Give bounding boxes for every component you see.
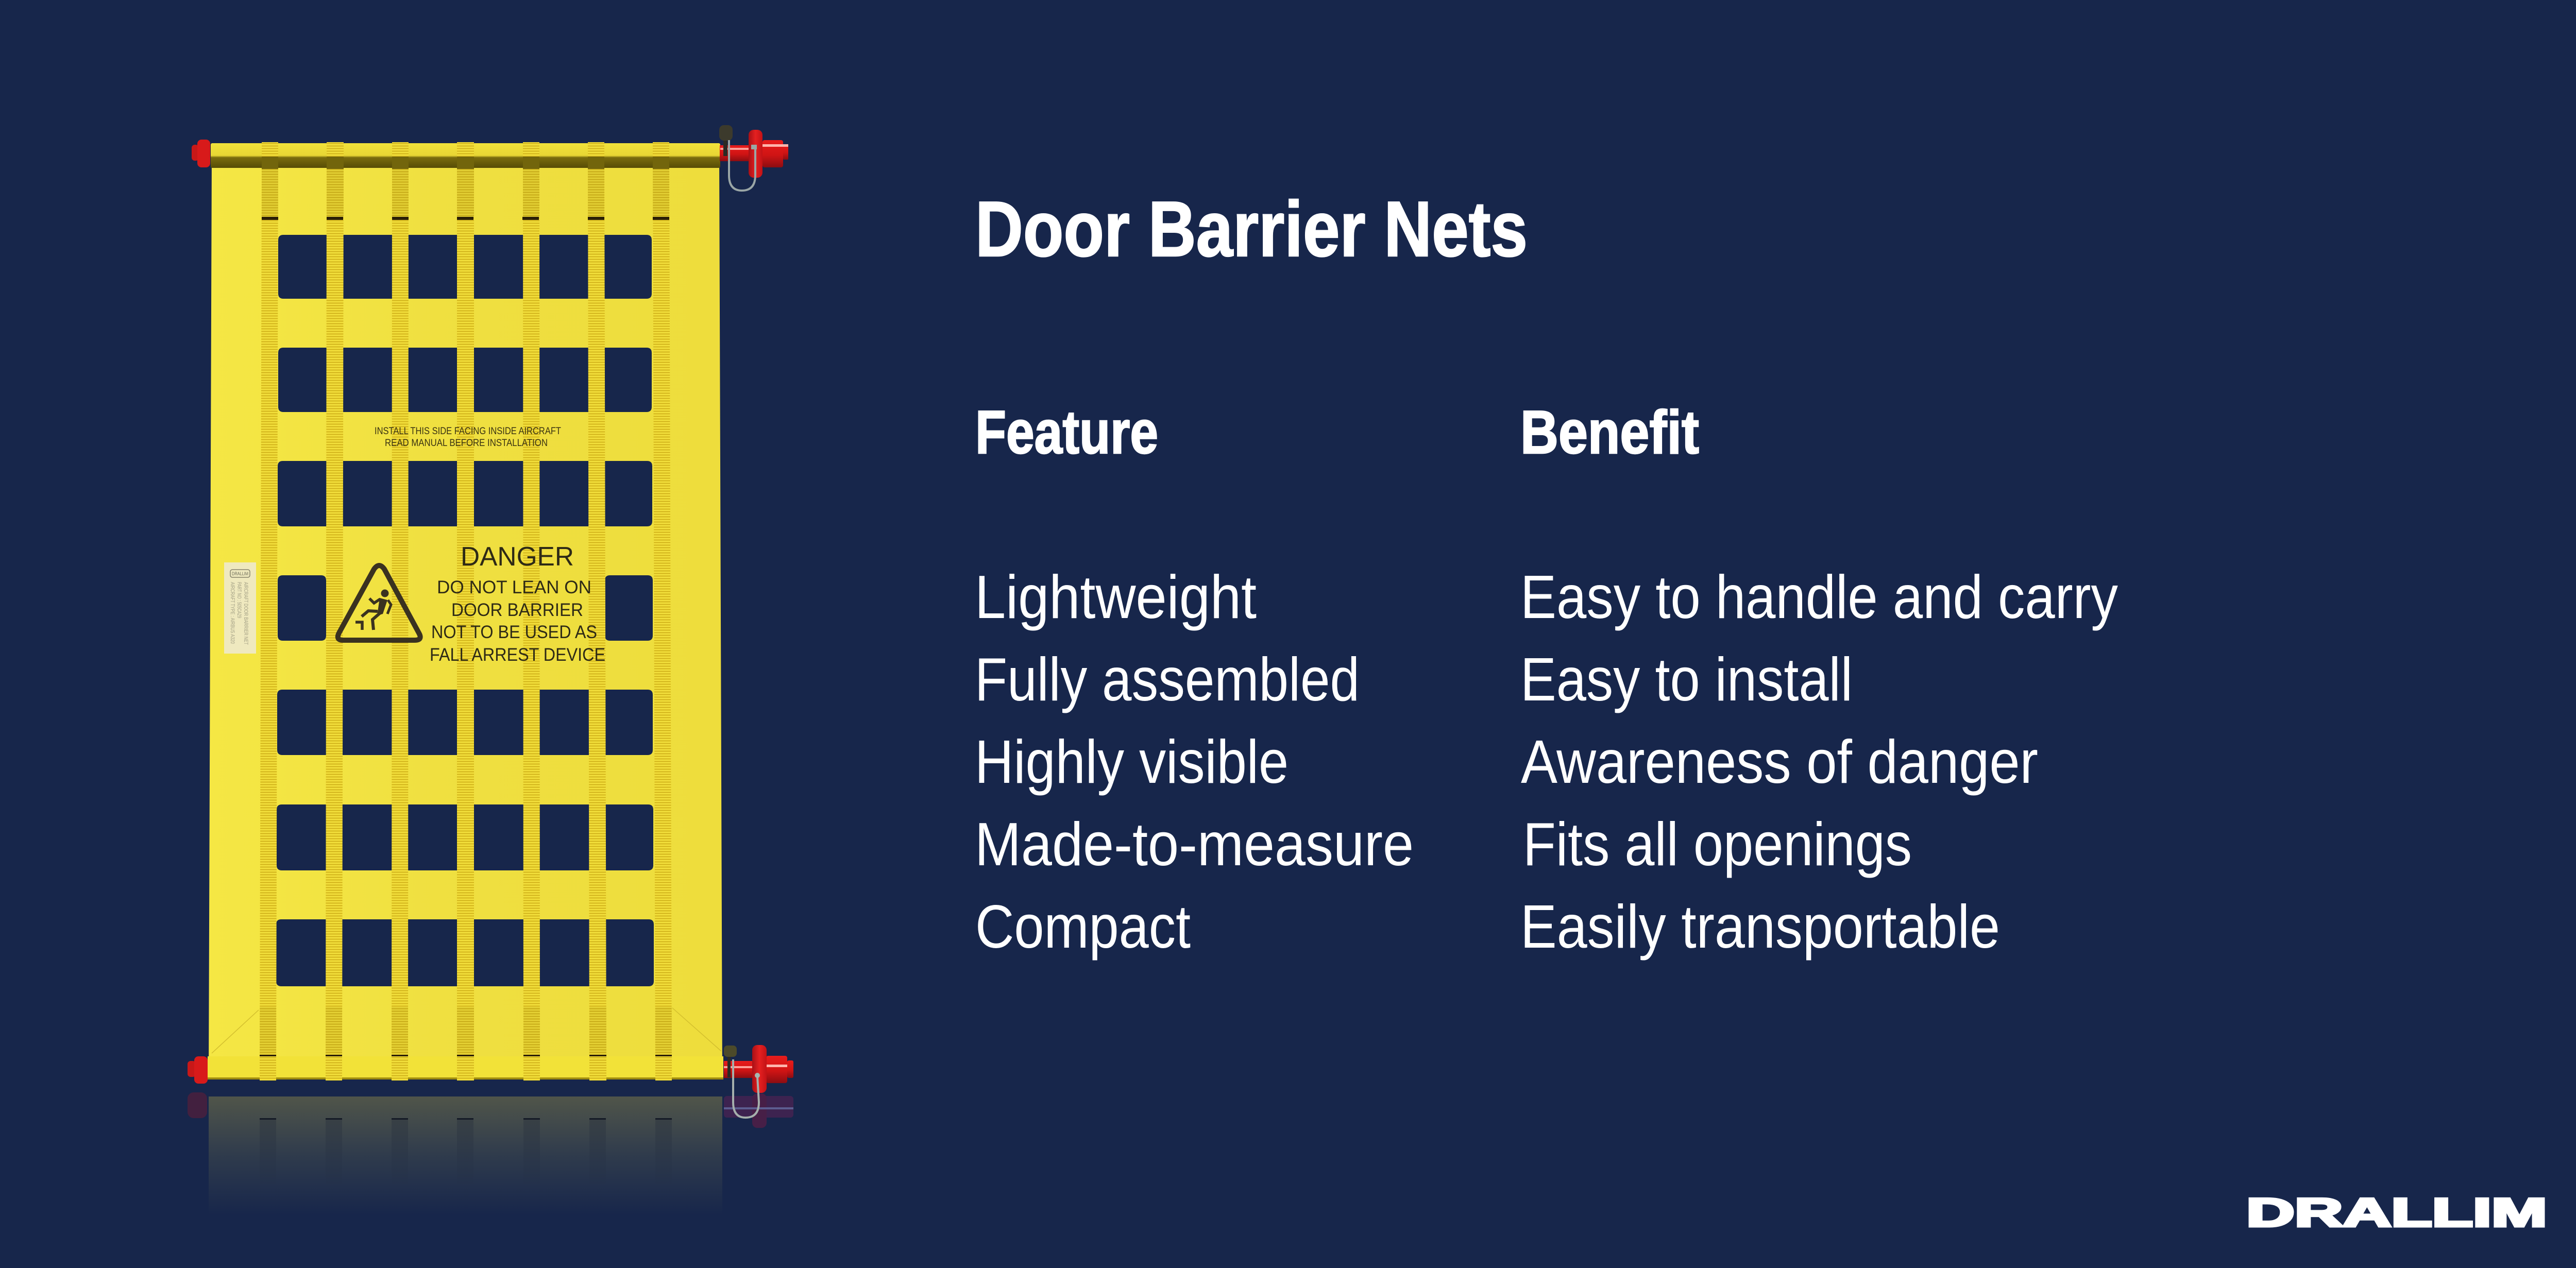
yellow panel with openings <box>209 155 722 1079</box>
feature list: Fully assembled <box>975 645 1360 714</box>
feature list <box>975 563 1414 961</box>
bottom rod sleeve <box>208 1055 723 1081</box>
danger warning text <box>430 542 605 665</box>
title: Door Barrier Nets <box>975 185 1528 273</box>
red release pin: bottom right <box>724 1045 793 1118</box>
install note <box>375 426 561 449</box>
install note: READ MANUAL BEFORE INSTALLATION <box>385 438 548 449</box>
feature list: Lightweight <box>975 563 1257 631</box>
benefit list: Fits all openings <box>1523 810 1912 879</box>
danger warning icon <box>338 566 420 640</box>
identification label: DRALLIM <box>232 571 248 576</box>
red end fitting: bottom left <box>188 1056 208 1084</box>
logo: Drallim: DRALLIM <box>2246 1190 2547 1235</box>
strap loops over rod <box>262 142 669 169</box>
red end fitting: top left <box>192 140 210 167</box>
benefit list: Easy to handle and carry <box>1520 563 2118 631</box>
identification label: AIRCRAFT DOOR BARRIER NET <box>243 582 249 645</box>
red release pin: top right <box>719 125 788 191</box>
upper strap stitching <box>262 168 669 217</box>
benefit list: Easy to install <box>1520 645 1853 714</box>
lower strap stitching and seams <box>212 1007 721 1054</box>
identification label: AIRCRAFT TYPE : AIRBUS A320 <box>229 582 235 644</box>
feature list: Compact <box>975 893 1191 961</box>
identification label <box>224 562 256 654</box>
feature list: Highly visible <box>975 728 1289 796</box>
top rod sleeve <box>211 143 720 168</box>
column heading: feature: Feature <box>975 398 1158 467</box>
benefit list: Easily transportable <box>1520 893 2000 961</box>
benefit list <box>1520 563 2118 961</box>
webbing straps <box>260 142 672 1081</box>
product photo: door barrier net <box>188 125 793 1215</box>
danger warning text: DO NOT LEAN ON <box>437 577 591 597</box>
identification label: PART NO : 505CA29 <box>236 582 242 618</box>
feature list: Made-to-measure <box>975 810 1414 879</box>
reflection of net on floor <box>188 1092 793 1215</box>
benefit list: Awareness of danger <box>1521 728 2038 796</box>
strap slots top <box>262 217 669 220</box>
danger warning text: DANGER <box>461 542 574 572</box>
danger warning text: FALL ARREST DEVICE <box>430 645 605 665</box>
danger warning text: NOT TO BE USED AS <box>431 622 597 642</box>
column heading: benefit: Benefit <box>1520 398 1699 467</box>
install note: INSTALL THIS SIDE FACING INSIDE AIRCRAFT <box>375 426 561 437</box>
danger warning text: DOOR BARRIER <box>451 600 583 620</box>
